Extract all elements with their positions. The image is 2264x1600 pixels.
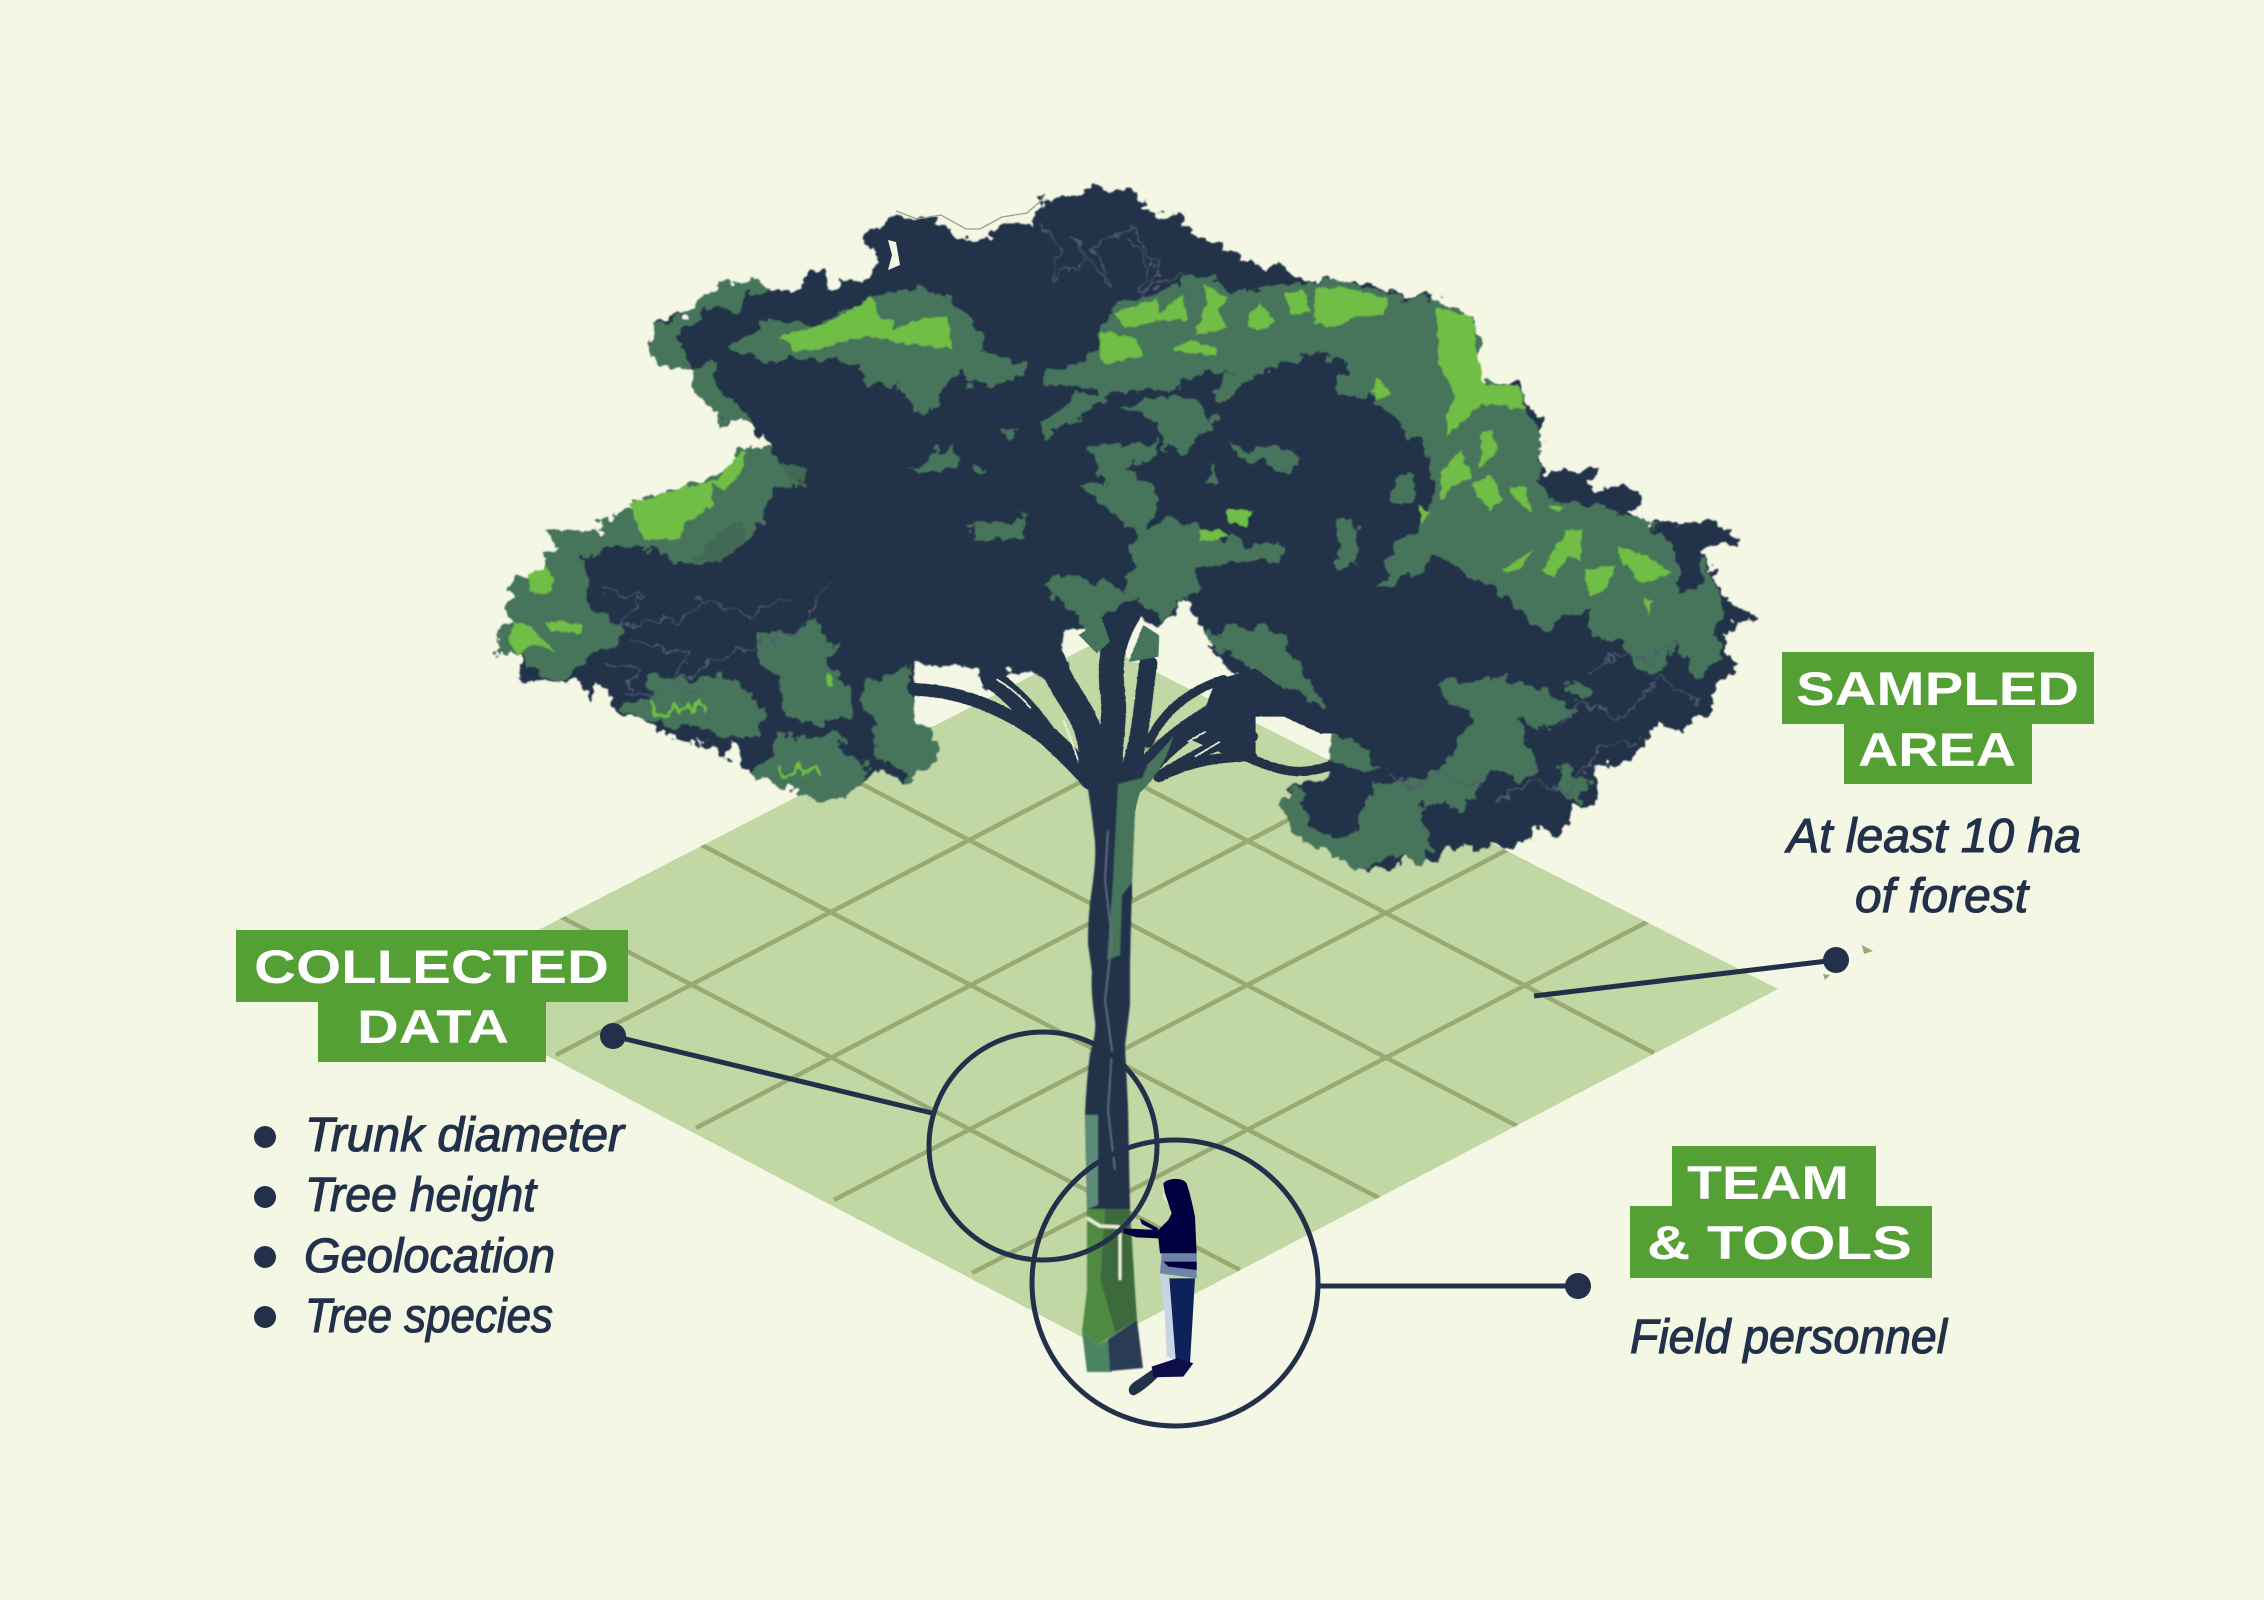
canopy tracery <box>600 225 1700 800</box>
text: sampled area note: of forest <box>1855 870 2030 923</box>
tree <box>498 184 1759 1395</box>
heading: team and tools: & TOOLS <box>1647 1216 1912 1269</box>
list: collected data: Tree height <box>305 1169 538 1222</box>
trunk <box>1077 760 1148 1372</box>
heading: sampled area <box>1782 652 2094 784</box>
callout rings and leader lines <box>600 947 1849 1426</box>
heading: team and tools <box>1630 1146 1932 1278</box>
mid green foliage right <box>1100 273 1735 870</box>
sampled plot grid <box>538 646 1778 1344</box>
list: collected data: Trunk diameter <box>305 1109 626 1162</box>
heading: team and tools: TEAM <box>1687 1156 1849 1209</box>
sky gap in crown <box>888 240 900 270</box>
branches <box>915 613 1377 900</box>
heading: sampled area: SAMPLED <box>1796 662 2079 715</box>
small flecks <box>1823 945 1873 980</box>
text: field personnel: Field personnel <box>1630 1311 1948 1364</box>
text: sampled area note: At least 10 ha <box>1784 810 2081 863</box>
list: collected data: Tree species <box>305 1290 553 1343</box>
heading: collected data: DATA <box>357 1000 509 1053</box>
heading: collected data <box>236 930 628 1062</box>
list: collected data <box>254 1109 626 1343</box>
heading: sampled area: AREA <box>1858 723 2016 776</box>
text: sampled area note <box>1784 810 2081 923</box>
canopy outline wisp <box>896 199 1043 229</box>
list: collected data: Geolocation <box>304 1230 555 1283</box>
tree crown <box>498 184 1759 870</box>
mid green foliage left <box>498 280 1120 800</box>
field person <box>1123 1179 1197 1395</box>
bright green highlights <box>509 285 1670 778</box>
heading: collected data: COLLECTED <box>254 940 609 993</box>
